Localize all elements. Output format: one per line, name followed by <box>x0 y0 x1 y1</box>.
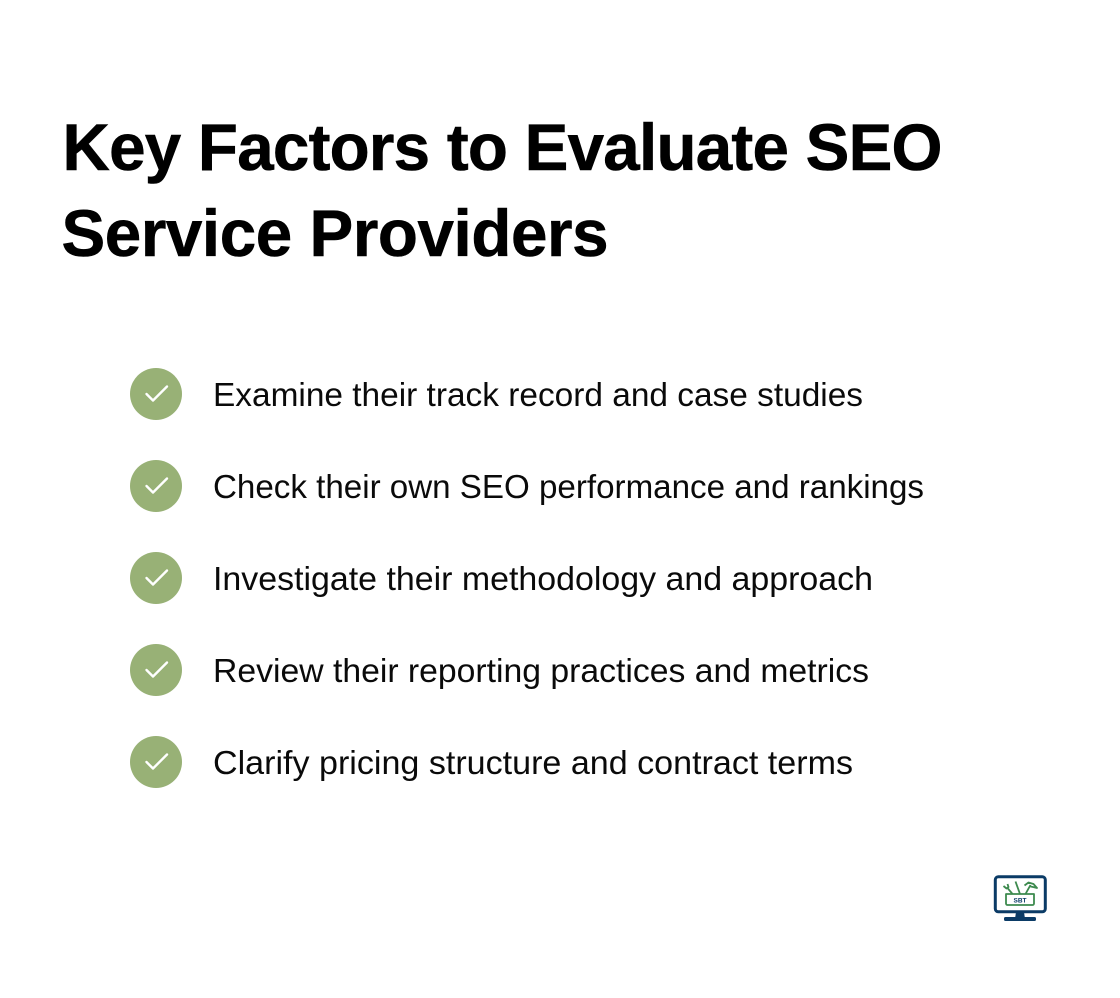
title <box>62 111 942 270</box>
item 5: pricing <box>130 736 853 788</box>
item 4: reporting: Review their reporting practices and metrics <box>213 652 869 689</box>
item 3: methodology: Investigate their methodology and approach <box>213 560 873 597</box>
item 2: own SEO performance <box>130 460 924 512</box>
title: Key Factors to Evaluate SEO <box>62 111 942 184</box>
item 1: track record <box>130 368 863 420</box>
item 5: pricing: Clarify pricing structure and contract terms <box>213 744 853 781</box>
icon: SBT monitor logo <box>995 877 1045 921</box>
item 2: own SEO performance: Check their own SEO performance and rankings <box>213 468 924 505</box>
item 4: reporting <box>130 644 869 696</box>
title: Service Providers <box>62 197 608 270</box>
checklist <box>130 368 924 788</box>
item 3: methodology <box>130 552 873 604</box>
icon: SBT monitor logo: SBT <box>1014 898 1027 904</box>
item 1: track record: Examine their track record and case studies <box>213 376 863 413</box>
